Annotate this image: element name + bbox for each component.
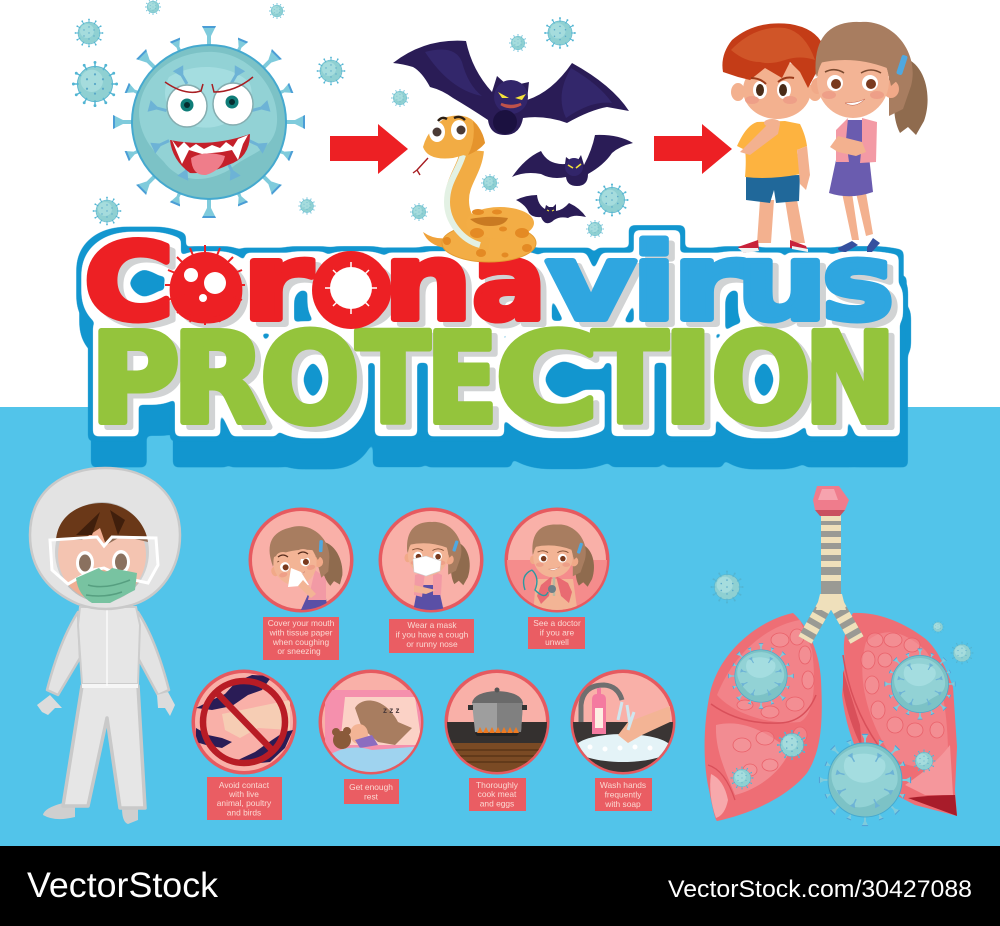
icon: hazmat suit figure: [30, 468, 180, 824]
word: PROTECTION: O: [711, 307, 811, 452]
step label: avoid animals: and birds: [227, 808, 261, 818]
step label: cover mouth: with tissue paper: [269, 628, 333, 638]
virus mouth: [170, 134, 250, 175]
word: PROTECTION: P: [90, 307, 180, 452]
suit torso: [78, 607, 140, 684]
step label: avoid animals: Avoid contact: [219, 780, 270, 790]
word: Corona: o: [168, 221, 244, 344]
mask: [76, 568, 137, 603]
step: cover mouth: [248, 508, 354, 612]
icon: small bat: [516, 195, 586, 223]
step label: wash hands: with soap: [604, 799, 641, 809]
suit legs and arms: [37, 612, 175, 824]
icon: large bat: [393, 41, 629, 135]
virus eyes: [165, 77, 253, 127]
word: Corona: C: [84, 221, 174, 344]
step label: cover mouth: Cover your mouth: [268, 618, 335, 628]
step: get enough rest: z z z: [383, 706, 399, 715]
trachea: [805, 486, 857, 640]
step label: wash hands: Wash hands: [600, 780, 646, 790]
word: Corona: [84, 221, 546, 344]
step label: wear mask: [389, 619, 474, 653]
word: PROTECTION: O: [260, 307, 360, 452]
step label: cook thoroughly: cook meat: [478, 789, 517, 799]
word: PROTECTION: C: [495, 307, 599, 452]
word: PROTECTION: R: [172, 307, 266, 452]
step label: cook thoroughly: Thoroughly: [476, 780, 519, 790]
word: virus: r: [672, 221, 744, 344]
arrow: virus to animals: [330, 124, 408, 174]
word: PROTECTION: T: [592, 307, 668, 452]
word: Corona: o: [311, 221, 393, 344]
step label: cook thoroughly: and eggs: [480, 798, 514, 808]
hood: [30, 468, 180, 609]
panel: protection steps: [192, 508, 676, 820]
step label: wear mask: or runny nose: [406, 639, 458, 649]
virus letter o in Corona: [165, 245, 245, 325]
step label: avoid animals: with live: [228, 789, 259, 799]
virus cutout in second o: [312, 251, 390, 329]
step label: cover mouth: [263, 617, 339, 660]
word: virus: v: [546, 221, 636, 344]
word: Corona: n: [384, 221, 472, 344]
word: PROTECTION: E: [426, 307, 498, 452]
step label: see a doctor: if you are: [540, 628, 575, 638]
step label: see a doctor: [528, 617, 585, 649]
step: avoid animals: [192, 670, 296, 774]
word: PROTECTION: T: [356, 307, 430, 452]
step label: get enough rest: [344, 779, 399, 804]
title: Coronavirus Protection: [84, 221, 896, 452]
word: virus: [546, 221, 894, 344]
word: virus: u: [737, 221, 827, 344]
lung viruses: [711, 571, 973, 826]
arrow: animals to children: [654, 124, 732, 174]
right lung: [842, 613, 957, 816]
word: PROTECTION: [90, 307, 896, 452]
step label: cover mouth: when coughing: [272, 637, 330, 647]
step label: get enough rest: rest: [364, 792, 379, 802]
goggles: [50, 537, 158, 584]
word: Corona: a: [472, 221, 546, 344]
step label: cover mouth: or sneezing: [277, 646, 321, 656]
footer bar: [0, 846, 1000, 926]
word: PROTECTION: I: [662, 307, 714, 452]
word: virus: i: [632, 221, 676, 344]
left lung: [705, 613, 822, 821]
blue lower panel: [0, 407, 1000, 847]
step label: wash hands: frequently: [605, 790, 642, 800]
step: get enough rest: [318, 670, 425, 780]
step label: see a doctor: unwell: [545, 637, 569, 647]
icon: girl: [811, 22, 928, 252]
icon: boy: [722, 23, 823, 253]
footer brand: VectorStock: [27, 866, 219, 905]
face: [55, 502, 149, 602]
icon: medium bat: [512, 135, 633, 186]
step label: wash hands: [595, 778, 652, 811]
step label: avoid animals: [207, 777, 282, 820]
step label: see a doctor: See a doctor: [533, 618, 581, 628]
step label: wear mask: if you have a cough: [396, 630, 469, 640]
step label: wear mask: Wear a mask: [407, 620, 457, 630]
icon: snake: [413, 116, 536, 262]
icon: angry virus character: [113, 26, 305, 218]
step label: get enough rest: Get enough: [349, 782, 393, 792]
word: PROTECTION: N: [804, 307, 896, 452]
step: wear mask: [378, 508, 484, 612]
white top background: [0, 0, 1000, 407]
step: see a doctor: [504, 508, 610, 615]
step label: cook thoroughly: [469, 778, 526, 811]
word: virus: s: [822, 221, 894, 344]
step: cook thoroughly: [444, 670, 550, 775]
footer image id: VectorStock.com/30427088: [668, 876, 972, 903]
word: Corona: r: [242, 221, 312, 344]
step: wash hands: [570, 670, 676, 777]
floating small viruses, top: [73, 0, 628, 237]
icon: infected lungs: [705, 486, 973, 826]
step label: avoid animals: animal, poultry: [217, 798, 272, 808]
